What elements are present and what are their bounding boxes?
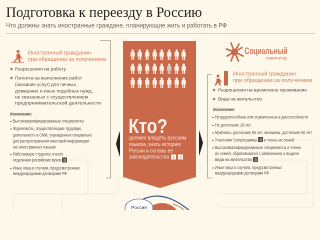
list: left exceptions: деятельность в СМИ, учрежденных специально — [13, 132, 92, 138]
list: left exceptions: Журналисты, осуществляющие трудовую — [13, 126, 82, 131]
list: right documents: Разрешения на временное проживание — [218, 88, 308, 92]
list: left documents: Патента на выполнение работ — [15, 76, 82, 80]
list: left documents: домашних и иных подобных нужд, — [15, 88, 93, 94]
list: right exceptions: и члены их семей — [264, 138, 294, 142]
list: right exceptions: 3 — [254, 157, 258, 162]
heading left: Иностранный гражданин — [28, 50, 91, 56]
list: right exceptions: Участники Госпрограммы — [215, 138, 257, 142]
list: right documents — [213, 88, 308, 102]
logo: Социальный — [244, 46, 288, 57]
text: requirement: России и основы ее — [129, 148, 173, 154]
text: requirement: 2 — [180, 154, 182, 160]
heading left — [28, 50, 106, 63]
list: right documents: Вида на жительство — [218, 96, 263, 102]
list: left exceptions: Иные лица в случаях, предусмотренных — [13, 166, 81, 170]
heading right — [233, 70, 312, 84]
heading: who: Кто? — [128, 116, 168, 138]
list: left documents: не связанных с осуществлением — [15, 94, 88, 100]
list: left documents — [10, 66, 102, 106]
list: right exceptions: Иные лица в случаях, предусмотренных — [215, 165, 283, 170]
text: requirement: 1 — [172, 154, 176, 160]
list: left exceptions — [10, 112, 92, 176]
list: right exceptions: Не достигшие 18 лет — [215, 122, 251, 128]
list: left exceptions: отделения российских вузов — [13, 158, 62, 162]
list: right exceptions: Исключение: — [213, 107, 235, 112]
list: right exceptions: их семей, обратившиеся с заявлением о выдаче — [215, 151, 299, 156]
list: left documents: (оказание услуг) для личных, — [15, 82, 77, 87]
heading right: при обращении за получением — [233, 78, 312, 84]
heading left: при обращении за получением — [28, 57, 106, 63]
panel: left work permits — [10, 40, 110, 178]
icon: door with person — [214, 71, 228, 86]
arrow: left — [116, 131, 120, 157]
list: left exceptions: Работающие студенты очного — [13, 152, 63, 156]
subtitle: Что должны знать иностранные граждане, планирующие жить и работать в РФ — [6, 22, 227, 30]
list: left exceptions: 3 — [64, 158, 66, 162]
title: Подготовка к переезду в Россию — [6, 5, 202, 21]
text: requirement — [129, 136, 186, 160]
list: left exceptions: на иностранных языках — [13, 144, 57, 150]
list: left documents: предпринимательской деятельности — [15, 100, 102, 106]
text: requirement: должен владеть русским — [129, 136, 186, 142]
list: left exceptions: Высококвалифицированные специалисты — [13, 118, 84, 124]
list: right exceptions: вида на жительство — [215, 157, 253, 162]
text: requirement: законодательства — [129, 154, 169, 160]
icon: logo star — [226, 43, 243, 61]
list: right exceptions: 3 — [260, 137, 262, 142]
list: left exceptions: для распространения массовой информации — [13, 138, 89, 144]
arrow: right — [199, 130, 203, 156]
list: left documents: Разрешения на работу — [15, 66, 67, 72]
panel: right residence — [208, 70, 312, 178]
logo: навигатор — [266, 56, 287, 62]
heading right: Иностранный гражданин — [233, 70, 296, 78]
icon group: people — [130, 50, 186, 88]
panel: center who — [123, 41, 196, 188]
logo — [226, 43, 288, 62]
list: right exceptions — [212, 107, 312, 176]
list: left exceptions: Исключение: — [10, 112, 32, 116]
list: right exceptions: Высококвалифицированные специалисты и члены — [215, 145, 301, 150]
diagram: Russia circles — [125, 196, 190, 240]
icon: walking person left — [11, 50, 24, 63]
text: requirement: языком, знать историю — [129, 142, 181, 148]
list: left exceptions: международными договорами РФ — [13, 171, 68, 176]
list: right exceptions: международными договорами РФ — [215, 170, 270, 176]
